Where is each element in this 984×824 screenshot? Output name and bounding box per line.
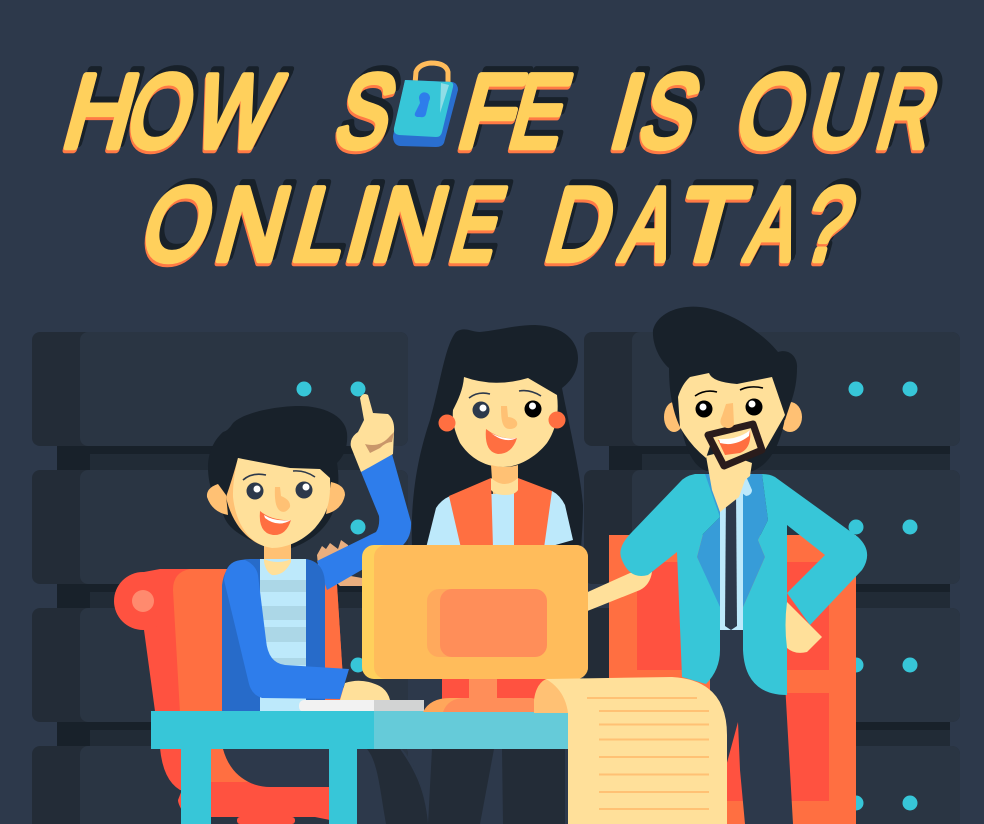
eyes <box>696 400 712 418</box>
shirt <box>426 491 573 548</box>
far hand <box>317 540 363 586</box>
collar <box>738 474 752 496</box>
vest <box>449 478 552 548</box>
face <box>233 458 330 548</box>
beard <box>680 412 786 472</box>
arm reaching to monitor <box>570 572 652 618</box>
title: T <box>664 167 759 283</box>
collar <box>491 478 518 495</box>
title: A <box>612 167 689 283</box>
title: U <box>798 54 889 170</box>
title: H <box>53 54 150 170</box>
title: ? <box>792 166 867 282</box>
server rack: left <box>32 332 408 824</box>
title: N <box>205 167 302 283</box>
hand on hip <box>786 602 822 653</box>
nose <box>275 487 290 512</box>
document <box>534 677 727 824</box>
nose <box>720 403 734 428</box>
title: F <box>448 54 535 170</box>
neck <box>264 542 291 568</box>
title: E <box>499 53 582 169</box>
mouth <box>486 429 517 454</box>
hand on keyboard <box>340 681 390 700</box>
title: S <box>629 53 712 169</box>
hair <box>208 406 347 550</box>
jacket lining <box>697 474 768 607</box>
monitor <box>362 545 588 712</box>
chin and neck <box>706 452 752 512</box>
collar <box>264 559 291 575</box>
title: A <box>737 167 814 283</box>
tie <box>725 490 737 630</box>
nose <box>501 406 517 429</box>
title: A <box>405 85 449 138</box>
earrings <box>438 412 566 432</box>
eyes <box>246 482 264 500</box>
shirt <box>720 490 743 630</box>
title: O <box>725 54 821 170</box>
keyboard <box>299 700 424 712</box>
seat <box>178 782 330 817</box>
title: N <box>363 167 460 283</box>
title: L <box>282 167 364 283</box>
ears <box>664 402 802 432</box>
front sleeve <box>224 560 349 699</box>
ears <box>207 484 228 515</box>
long hair <box>412 325 583 548</box>
character: man with beard <box>570 307 867 824</box>
jacket <box>620 474 720 684</box>
title: O <box>116 53 208 169</box>
title <box>53 53 950 283</box>
hair <box>653 307 797 427</box>
face <box>453 377 558 467</box>
eyes <box>472 402 490 418</box>
trousers <box>223 745 428 824</box>
mouth <box>718 430 750 455</box>
face <box>678 373 785 458</box>
icon: padlock <box>393 63 458 147</box>
chair: right <box>609 535 856 824</box>
character: man in blue <box>207 394 428 824</box>
title: D <box>535 166 628 282</box>
server rack: right <box>584 332 960 824</box>
shirt <box>260 559 306 711</box>
raised hand <box>351 394 394 472</box>
title: I <box>335 167 391 283</box>
trousers <box>710 630 793 824</box>
face shading <box>226 458 290 548</box>
torso <box>222 559 325 711</box>
title: R <box>867 54 950 170</box>
mouth <box>260 511 291 535</box>
title: S <box>325 53 408 169</box>
title: W <box>183 54 293 170</box>
title: O <box>131 167 227 283</box>
goatee <box>708 424 762 466</box>
chair: left <box>114 569 350 824</box>
character: woman <box>412 325 583 548</box>
woman's legs <box>428 749 565 824</box>
desk <box>151 711 570 824</box>
title: I <box>600 54 656 170</box>
neck <box>491 465 518 500</box>
raised arm <box>317 454 411 590</box>
title: E <box>440 167 516 283</box>
